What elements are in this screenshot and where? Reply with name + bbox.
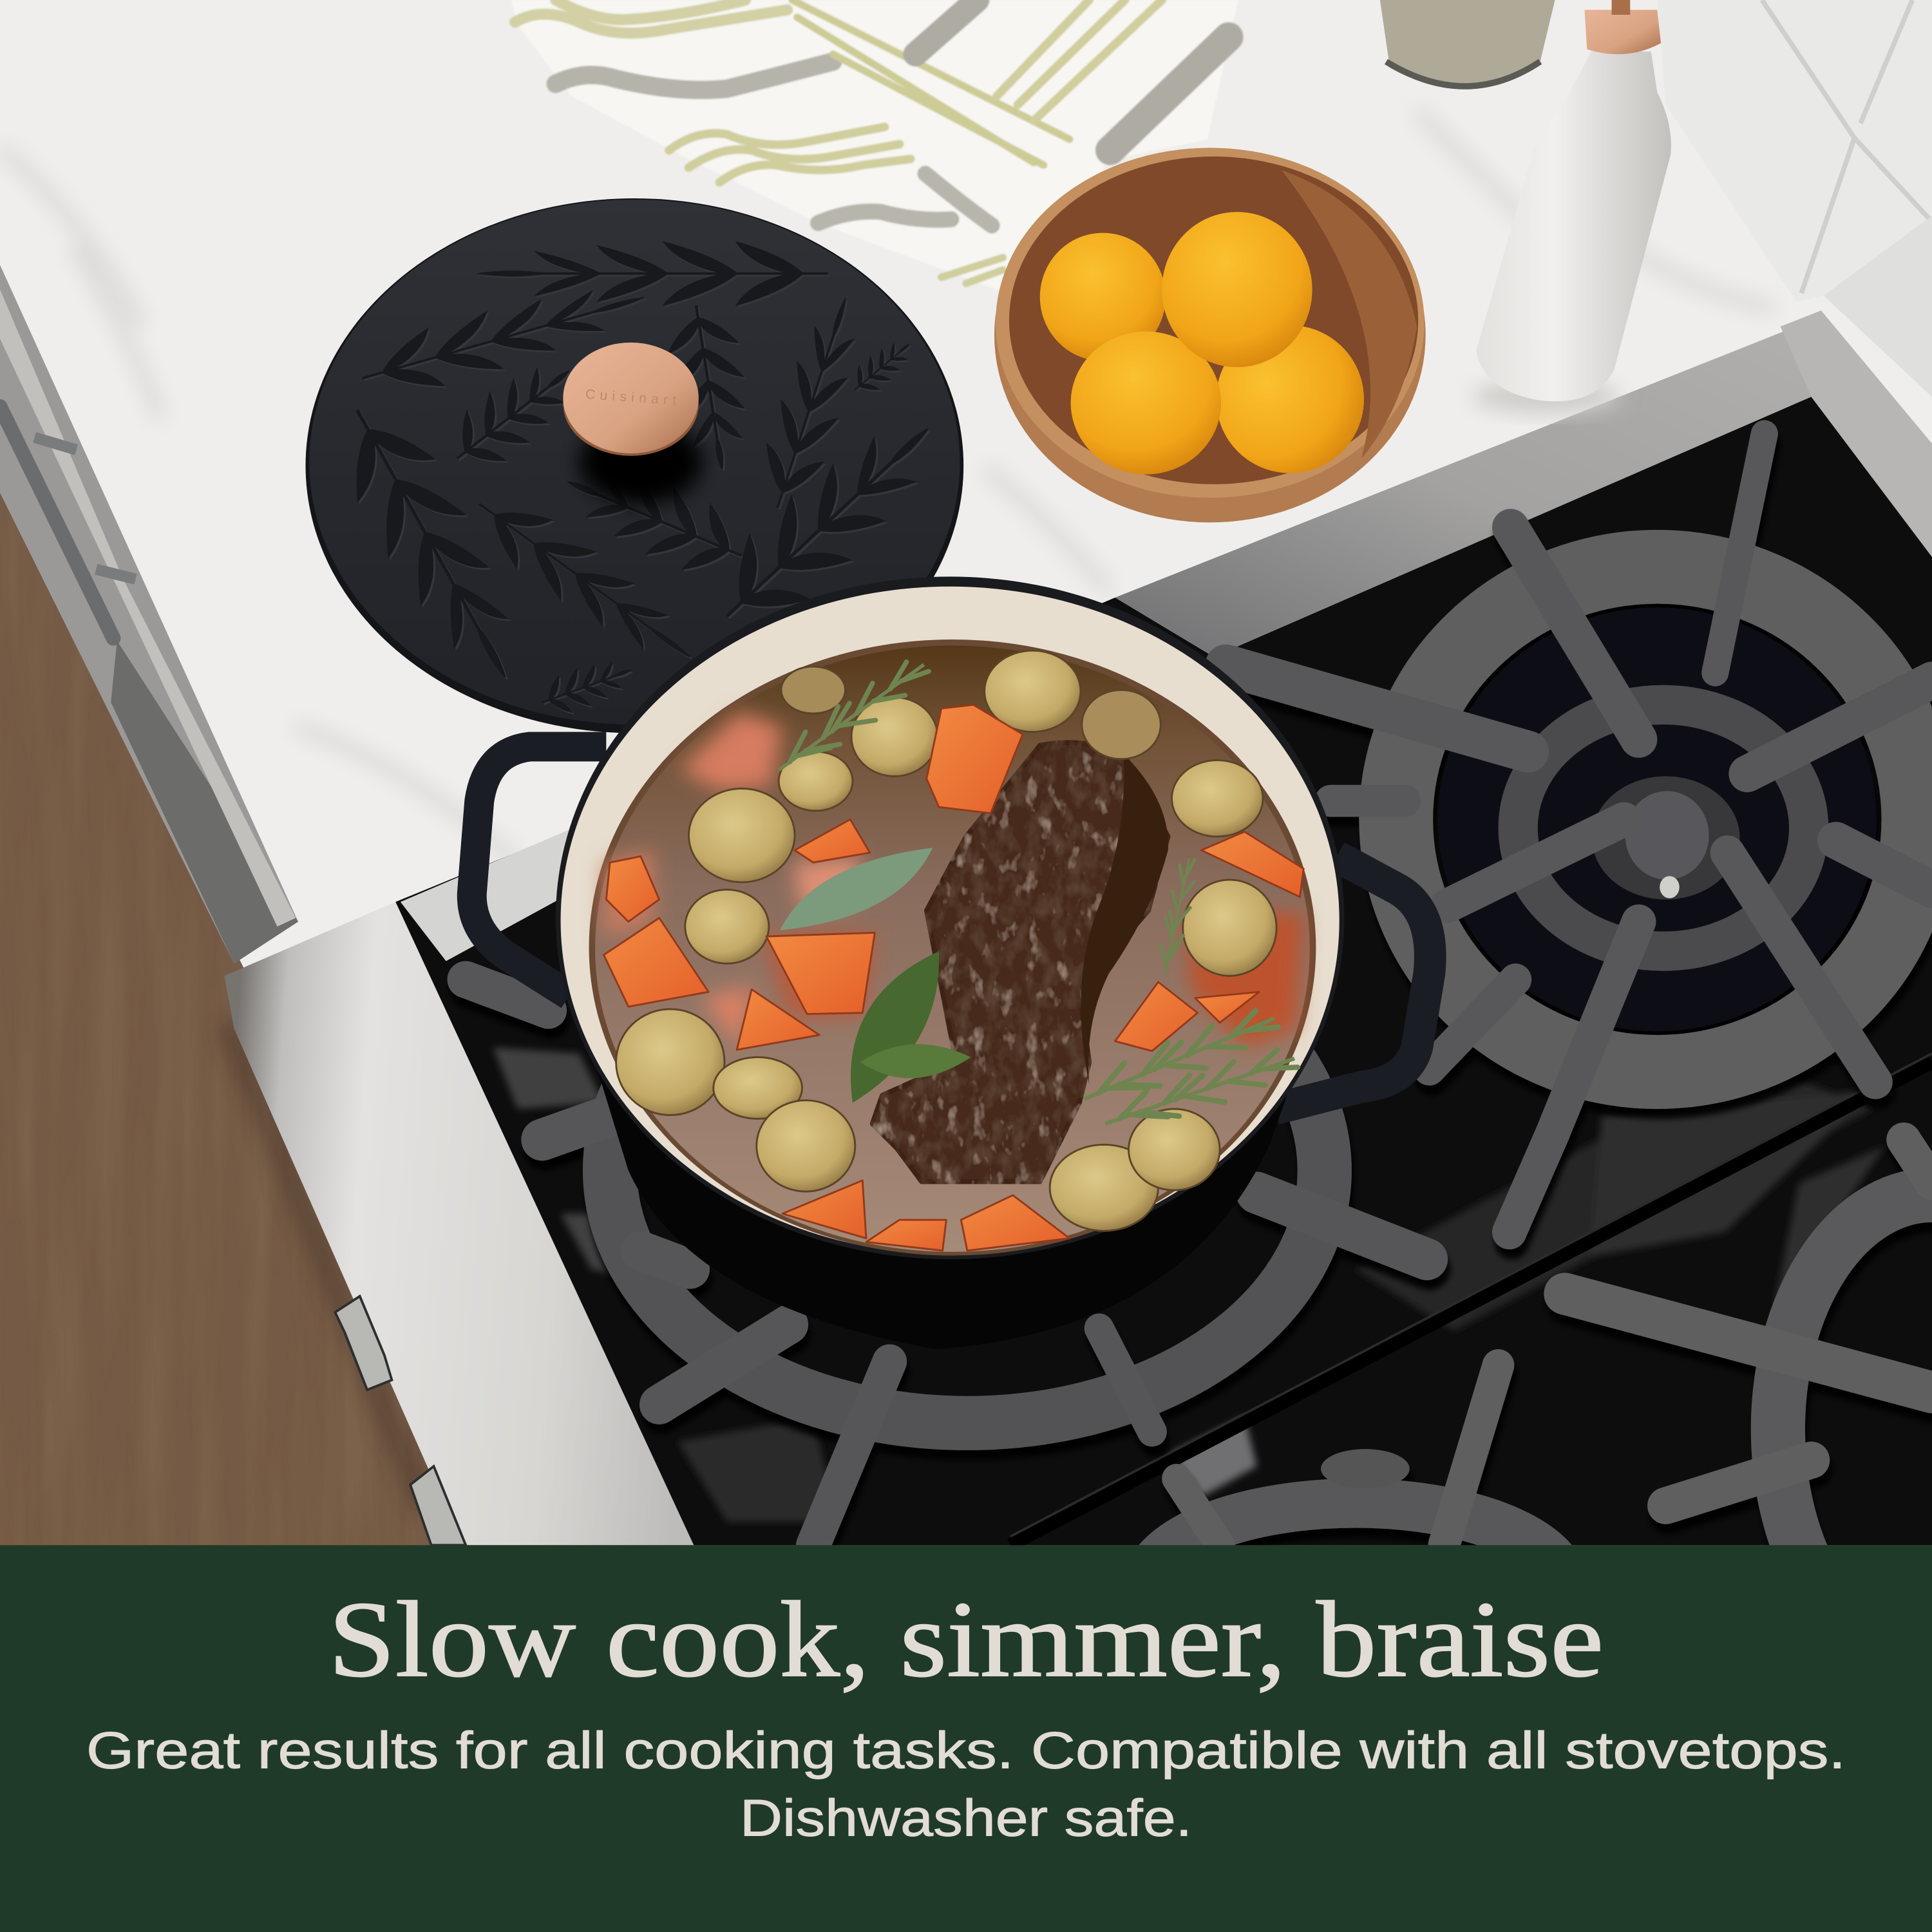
hinge latches [335, 1296, 466, 1545]
lemons [1040, 212, 1391, 500]
dutch oven lid with embossed botanicals [305, 198, 963, 733]
back-right burner fragment [1146, 1140, 1932, 1676]
dutch oven lid with embossed botanicals: Cuisinart [585, 387, 677, 408]
carrots [604, 705, 1303, 1251]
soap bottle with copper pump [1472, 0, 1671, 414]
caption band [0, 1545, 1932, 1932]
stovetop surface [395, 310, 1932, 1545]
rosemary sprigs [769, 651, 1301, 1141]
description line one: Great results for all cooking tasks. Compatible with all stovetops. [86, 1722, 1846, 1780]
pot body [579, 936, 1343, 1349]
description line two: Dishwasher safe. [740, 1790, 1192, 1848]
lid emboss shadows [319, 242, 957, 721]
potatoes [616, 650, 1276, 1231]
metal canister [1380, 0, 1555, 88]
base cabinet and handle [0, 265, 298, 963]
submerged carrot tint [604, 712, 1303, 1047]
bay leaves [780, 848, 971, 1103]
range steel side panel [224, 902, 694, 1545]
front burner [466, 918, 1427, 1545]
pot handles [472, 746, 1430, 1109]
right burner [1226, 433, 1932, 1232]
beef roast [873, 743, 1168, 1182]
lid emboss highlights [321, 244, 959, 723]
wooden bowl [994, 148, 1426, 522]
pot rim and interior [556, 576, 1344, 1259]
towel [511, 0, 1238, 292]
wood floor [0, 487, 475, 1545]
marble countertop [0, 0, 1932, 1545]
heading: Slow cook, simmer, braise [328, 1580, 1604, 1700]
backsplash tiles [1657, 0, 1932, 397]
